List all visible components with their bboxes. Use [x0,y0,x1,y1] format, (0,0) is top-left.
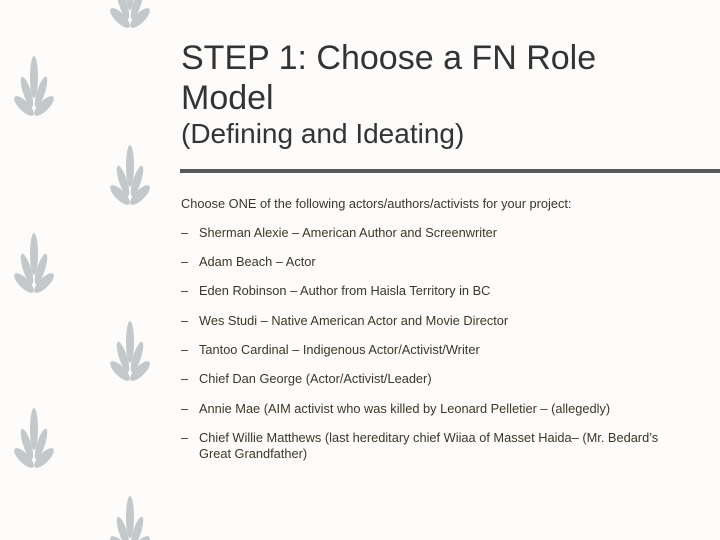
subtitle: (Defining and Ideating) [181,118,464,149]
icon: leaf [107,0,153,31]
list item: Great Grandfather) [199,446,307,461]
icon: leaf [107,145,153,208]
text: Sherman Alexie – American Author and Screenwriter [199,225,497,240]
list item: – [181,254,188,269]
title [181,39,596,117]
list item: – [181,401,188,416]
list item: – [181,313,188,328]
rule [180,169,720,173]
list item: – [181,225,188,240]
list item [181,342,480,357]
icon: leaf [11,408,57,471]
list item [181,283,490,298]
list item: – [181,342,188,357]
list item [181,225,497,240]
list item [181,313,508,328]
list item: Chief Willie Matthews (last hereditary chief Wiiaa of Masset Haida– (Mr. Bedard’s [199,430,658,445]
list item: – [181,283,188,298]
intro text: Choose ONE of the following actors/authors/activists for your project: [181,196,571,211]
list item [181,401,610,416]
text: Wes Studi – Native American Actor and Movie Director [199,313,508,328]
list item: – [181,430,188,445]
title: Model [181,79,274,117]
list item [181,371,432,386]
list item: – [181,371,188,386]
icon: leaf [11,233,57,296]
text: Annie Mae (AIM activist who was killed by Leonard Pelletier – (allegedly) [199,401,610,416]
text: Tantoo Cardinal – Indigenous Actor/Activist/Writer [199,342,480,357]
decorative leaves [14,0,150,540]
list item [181,430,658,461]
text: Adam Beach – Actor [199,254,316,269]
icon: leaf [107,496,153,540]
text: Eden Robinson – Author from Haisla Territory in BC [199,283,490,298]
text: Chief Dan George (Actor/Activist/Leader) [199,371,432,386]
list item [181,254,316,269]
title: STEP 1: Choose a FN Role [181,39,596,77]
icon: leaf [11,56,57,119]
icon: leaf [107,321,153,384]
